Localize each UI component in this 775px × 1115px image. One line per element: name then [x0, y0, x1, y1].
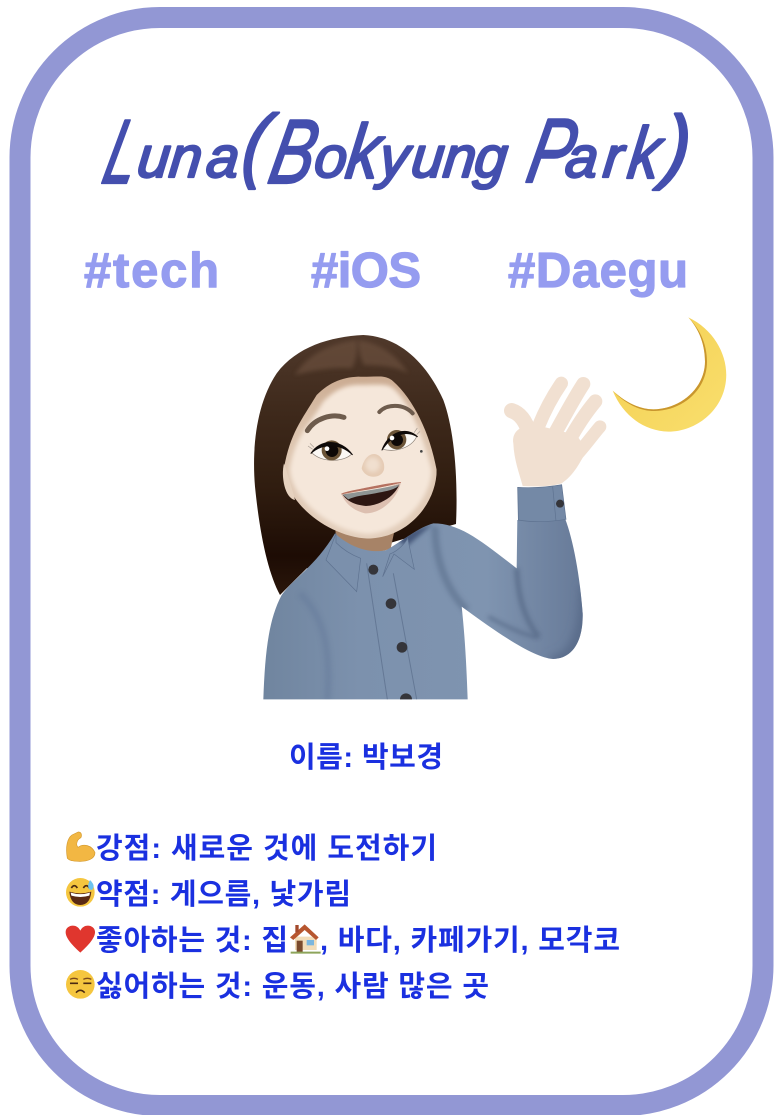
icon: flexed biceps — [67, 832, 95, 861]
title: k — [342, 109, 389, 195]
title: k — [624, 113, 669, 194]
weakness line: 약점: 게으름, 낯가림 — [96, 878, 351, 911]
nose — [362, 454, 384, 477]
shirt — [263, 518, 583, 699]
title: yung — [373, 125, 511, 190]
hair highlight — [295, 340, 408, 375]
beauty mark — [420, 450, 423, 453]
hashtag: Daegu: #Daegu — [508, 244, 688, 298]
hashtag: tech: #tech — [84, 244, 219, 298]
face — [284, 376, 437, 538]
collar — [326, 533, 414, 592]
left ear — [283, 463, 295, 500]
title — [95, 98, 696, 203]
title: P — [520, 101, 585, 202]
icon: house — [290, 924, 321, 953]
title: ar — [563, 125, 629, 190]
title: o — [312, 125, 351, 190]
title: ) — [652, 98, 696, 190]
icon: red heart — [66, 926, 95, 953]
eyebrows — [307, 416, 344, 431]
waving hand — [512, 383, 600, 486]
icon: grinning face with sweat — [66, 878, 95, 907]
icon: unamused face — [66, 970, 95, 999]
shirt shading — [300, 523, 585, 700]
hashtag: iOS: #iOS — [311, 244, 421, 298]
icon: crescent moon — [613, 317, 726, 432]
left eye — [308, 440, 352, 460]
hair — [254, 335, 457, 595]
shirt cuff — [518, 485, 566, 522]
memoji portrait — [254, 335, 600, 700]
dislikes line: 싫어하는 것: 운동, 사람 많은 곳 — [96, 970, 489, 1003]
title: L — [95, 102, 152, 203]
right eye — [382, 428, 420, 450]
title: ( — [238, 98, 281, 190]
likes line: 좋아하는 것: 집 — [96, 924, 288, 957]
title: una — [135, 125, 243, 190]
shirt buttons — [368, 565, 412, 699]
hashtags — [84, 244, 688, 298]
name line: 이름: 박보경 — [289, 741, 443, 774]
title: B — [262, 102, 327, 203]
strength line: 강점: 새로운 것에 도전하기 — [96, 832, 437, 865]
likes line continued: , 바다, 카페가기, 모각코 — [320, 924, 620, 957]
profile list — [66, 832, 620, 1003]
mouth — [341, 482, 401, 513]
neck — [335, 520, 397, 577]
